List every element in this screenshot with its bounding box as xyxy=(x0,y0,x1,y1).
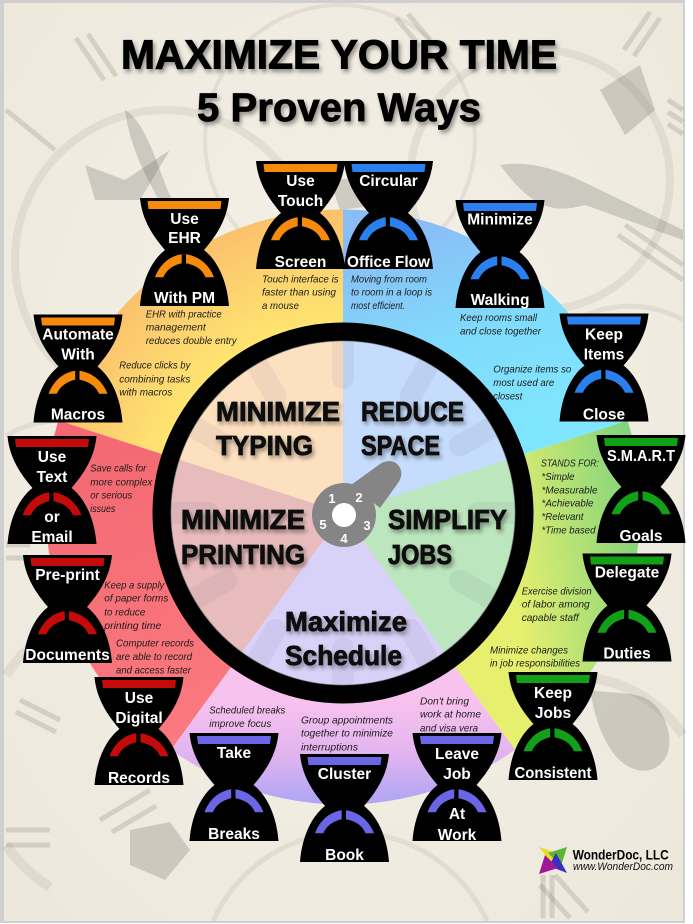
note: exercise division: capable staff xyxy=(522,612,580,624)
outer colour wheel xyxy=(48,210,638,804)
hourglass: Use Text or Email: or xyxy=(44,509,60,526)
note: computer records xyxy=(116,638,195,676)
hourglass: Keep Jobs Consistent: Keep xyxy=(534,685,572,702)
hub numbers: 2 xyxy=(355,490,363,505)
note: EHR with practice management: management xyxy=(146,322,207,334)
hub numbers: 3 xyxy=(363,518,371,533)
hourglass: Delegate Duties: Duties xyxy=(603,646,651,662)
note: exercise division xyxy=(522,585,592,624)
note: minimize changes xyxy=(490,644,581,670)
note: don't bring work home: Don't bring xyxy=(420,695,469,707)
note: organize items xyxy=(493,363,571,402)
heading: simplify jobs xyxy=(388,504,507,570)
note: touch interface: a mouse xyxy=(262,300,299,312)
hourglass: Take Breaks: Breaks xyxy=(208,826,260,843)
note: exercise division: of labor among xyxy=(522,599,590,611)
note: save calls: Save calls for xyxy=(90,463,147,475)
note: reduce clicks: combining tasks xyxy=(119,373,191,385)
hourglass: Use EHR With PM xyxy=(140,198,229,307)
hourglass: Minimize Walking: Minimize xyxy=(467,212,533,228)
dial slice: space xyxy=(343,341,506,499)
note: don't bring work home: work at home xyxy=(420,709,481,721)
note: moving in a loop: most efficient. xyxy=(351,300,405,312)
hub centre xyxy=(332,503,356,527)
hub numbers: 4 xyxy=(340,531,348,546)
dial slice: schedule xyxy=(242,540,444,685)
heading: minimize printing: MINIMIZE xyxy=(181,504,305,535)
hourglass: Take Breaks xyxy=(190,733,278,843)
note: moving in a loop: Moving from room xyxy=(351,273,427,285)
hourglass: S.M.A.R.T Goals: S.M.A.R.T xyxy=(607,448,675,465)
note: save calls: issues xyxy=(90,503,116,515)
hourglass: Pre-print Documents: Documents xyxy=(25,647,110,664)
note: EHR with practice management: reduces double entry xyxy=(146,335,237,347)
note: computer records: Computer records xyxy=(116,638,195,650)
heading: maximize schedule: Maximize xyxy=(285,606,407,637)
note: moving in a loop xyxy=(351,273,433,312)
hourglass: Use Text or Email: Text xyxy=(37,469,67,486)
title: 5 Proven Ways xyxy=(197,86,481,130)
note: SMART stands for xyxy=(541,458,599,536)
hourglass: Use Digital Records: Digital xyxy=(115,710,163,727)
hourglass: Leave Job At Work: Job xyxy=(443,766,471,783)
hourglass: Delegate Duties: Delegate xyxy=(595,564,660,582)
note: SMART stands for: *Achievable xyxy=(542,498,594,510)
wedge: minimize printing (red) xyxy=(48,422,324,747)
note: keep rooms small: Keep rooms small xyxy=(460,312,538,324)
heading: simplify jobs: JOBS xyxy=(388,539,452,570)
note: save calls: more complex xyxy=(90,476,153,488)
hourglass: Use Text or Email: Use xyxy=(38,449,67,466)
note: touch interface: faster than using xyxy=(262,287,336,299)
dial rim xyxy=(171,341,515,685)
hourglass: Circular Office Flow xyxy=(344,161,433,271)
note: organize items: Organize items so xyxy=(493,363,571,375)
hourglass: Leave Job At Work: Leave xyxy=(435,746,479,763)
wedge: reduce space (blue) xyxy=(343,210,624,498)
note: SMART stands for: STANDS FOR: xyxy=(541,458,599,470)
hourglass: Leave Job At Work xyxy=(412,733,502,844)
dial slice: typing xyxy=(180,341,343,504)
hourglass: Keep Jobs Consistent: Jobs xyxy=(535,705,571,722)
hourglass: Delegate Duties xyxy=(582,554,672,662)
hand xyxy=(351,461,401,508)
hourglass: Leave Job At Work: Work xyxy=(438,827,477,844)
note: save calls: or serious xyxy=(90,490,133,502)
hourglass: Pre-print Documents: Pre-print xyxy=(35,567,100,584)
hourglass: Automate With Macros: Automate xyxy=(42,326,114,344)
hub numbers: 5 xyxy=(319,517,327,532)
note: computer records: are able to record xyxy=(116,651,193,663)
note: moving in a loop: to room in a loop is xyxy=(351,287,433,299)
hourglass: Circular Office Flow: Office Flow xyxy=(347,254,431,271)
hourglass: S.M.A.R.T Goals: Goals xyxy=(619,528,663,545)
title xyxy=(121,32,557,130)
hourglass: Automate With Macros: Macros xyxy=(51,406,105,424)
note: exercise division: Exercise division xyxy=(522,585,592,597)
hourglass: Use Text or Email: Email xyxy=(31,529,73,546)
hub xyxy=(312,483,376,547)
hour marks xyxy=(165,335,521,691)
hourglass: Keep Jobs Consistent xyxy=(508,672,598,782)
hourglass: Keep Items Close: Keep xyxy=(585,326,623,344)
hourglass: Pre-print Documents xyxy=(23,555,112,664)
company url: www.WonderDoc.com xyxy=(573,861,673,873)
note: scheduled breaks: Scheduled breaks xyxy=(209,704,286,716)
heading: maximize schedule xyxy=(285,606,407,671)
note: SMART stands for: *Relevant xyxy=(542,511,584,523)
wedge: minimize typing (yellow) xyxy=(65,210,343,504)
clock ring xyxy=(162,332,524,694)
hourglass: Keep Items Close: Close xyxy=(583,406,625,424)
note: don't bring work home: and visa vera xyxy=(420,722,478,734)
hourglass: Use EHR With PM: EHR xyxy=(168,230,201,247)
heading: minimize printing xyxy=(181,504,305,570)
heading: simplify jobs: SIMPLIFY xyxy=(388,504,507,535)
hourglass: Use Text or Email xyxy=(8,436,96,546)
heading: reduce space: REDUCE xyxy=(361,396,464,427)
note: reduce clicks: Reduce clicks by xyxy=(119,360,191,372)
hourglass: Cluster Book xyxy=(300,754,389,864)
note: scheduled breaks: improve focus xyxy=(209,718,272,730)
hourglass: Leave Job At Work: At xyxy=(449,806,465,823)
hourglass: Use Touch Screen: Use xyxy=(286,173,315,190)
hourglass: Minimize Walking: Walking xyxy=(471,292,529,309)
hourglass: S.M.A.R.T Goals xyxy=(596,435,686,545)
hourglass: Use Touch Screen: Screen xyxy=(275,254,326,271)
note: keep a supply: of paper forms xyxy=(104,593,169,605)
note: reduce clicks: with macros xyxy=(119,387,173,399)
note: computer records: and access faster xyxy=(116,664,191,676)
hub numbers: 1 xyxy=(328,491,336,506)
clock hand and hub xyxy=(312,461,401,547)
note: EHR with practice management: EHR with practice xyxy=(146,308,222,320)
hourglass: Use Digital Records: Records xyxy=(108,770,170,787)
note: group appointments: interruptions xyxy=(301,741,359,753)
note: save calls xyxy=(90,463,153,515)
note: organize items: most used are xyxy=(493,377,554,389)
hourglass: Minimize Walking xyxy=(456,200,544,309)
dial slice: jobs xyxy=(363,460,515,652)
heading: minimize printing: PRINTING xyxy=(181,539,305,570)
icon: pinwheel star xyxy=(539,847,567,874)
wedge: simplify jobs (green) xyxy=(363,422,638,750)
note: SMART stands for: *Time based xyxy=(542,524,597,536)
note: touch interface xyxy=(262,273,339,312)
wedge: maximize schedule (purple) xyxy=(173,548,515,804)
hourglass: Cluster Book: Book xyxy=(325,847,364,864)
hourglass: Use EHR With PM: Use xyxy=(170,211,199,228)
heading: minimize typing xyxy=(216,396,340,461)
note: keep a supply: printing time xyxy=(103,620,161,632)
hourglass: Circular Office Flow: Circular xyxy=(359,173,418,190)
note: keep a supply: to reduce xyxy=(104,606,145,618)
hourglass: Keep Items Close: Items xyxy=(584,346,624,364)
hourglass: Use Digital Records: Use xyxy=(125,690,154,707)
note: group appointments xyxy=(301,714,394,753)
company name: WonderDoc, LLC xyxy=(573,847,669,862)
hub numbers xyxy=(319,490,371,546)
hourglass: Cluster Book: Cluster xyxy=(318,766,371,783)
note: keep rooms small xyxy=(460,312,541,337)
note: scheduled breaks xyxy=(209,704,286,730)
note: minimize changes: Minimize changes xyxy=(490,644,569,656)
hourglass: Use Digital Records xyxy=(94,677,184,787)
logo: WonderDoc xyxy=(539,847,673,874)
note: minimize changes: in job responsibilities xyxy=(490,658,581,670)
hourglass: Automate With Macros xyxy=(34,314,122,424)
note: don't bring work home xyxy=(420,695,481,734)
dial slice: printing xyxy=(171,460,324,652)
note: organize items: closest xyxy=(493,390,523,402)
note: EHR with practice management xyxy=(146,308,237,347)
note: group appointments: together to minimize xyxy=(301,728,393,740)
note: SMART stands for: *Measurable xyxy=(542,484,598,496)
hourglass: Take Breaks: Take xyxy=(217,745,251,762)
heading: reduce space: SPACE xyxy=(361,430,440,461)
hourglass: Use Touch Screen xyxy=(256,161,345,271)
heading: minimize typing: TYPING xyxy=(216,430,313,461)
hourglass: Use EHR With PM: With PM xyxy=(154,290,215,307)
note: keep rooms small: and close together xyxy=(460,325,541,337)
heading: minimize typing: MINIMIZE xyxy=(216,396,340,427)
note: group appointments: Group appointments xyxy=(301,714,394,726)
hourglass: Keep Jobs Consistent: Consistent xyxy=(514,765,592,782)
heading: maximize schedule: Schedule xyxy=(285,640,402,671)
title: MAXIMIZE YOUR TIME xyxy=(121,32,557,78)
hourglass: Automate With Macros: With xyxy=(61,346,95,364)
heading: reduce space xyxy=(361,396,464,461)
hourglass: Use Touch Screen: Touch xyxy=(278,193,323,210)
note: SMART stands for: *Simple xyxy=(542,471,575,483)
note: keep a supply xyxy=(103,579,169,632)
dial headings xyxy=(181,396,507,671)
clock dial xyxy=(171,341,515,685)
hourglass: Keep Items Close xyxy=(560,314,648,424)
note: keep a supply: Keep a supply xyxy=(104,579,165,591)
note: touch interface: Touch interface is xyxy=(262,273,339,285)
note: reduce clicks xyxy=(119,360,191,399)
